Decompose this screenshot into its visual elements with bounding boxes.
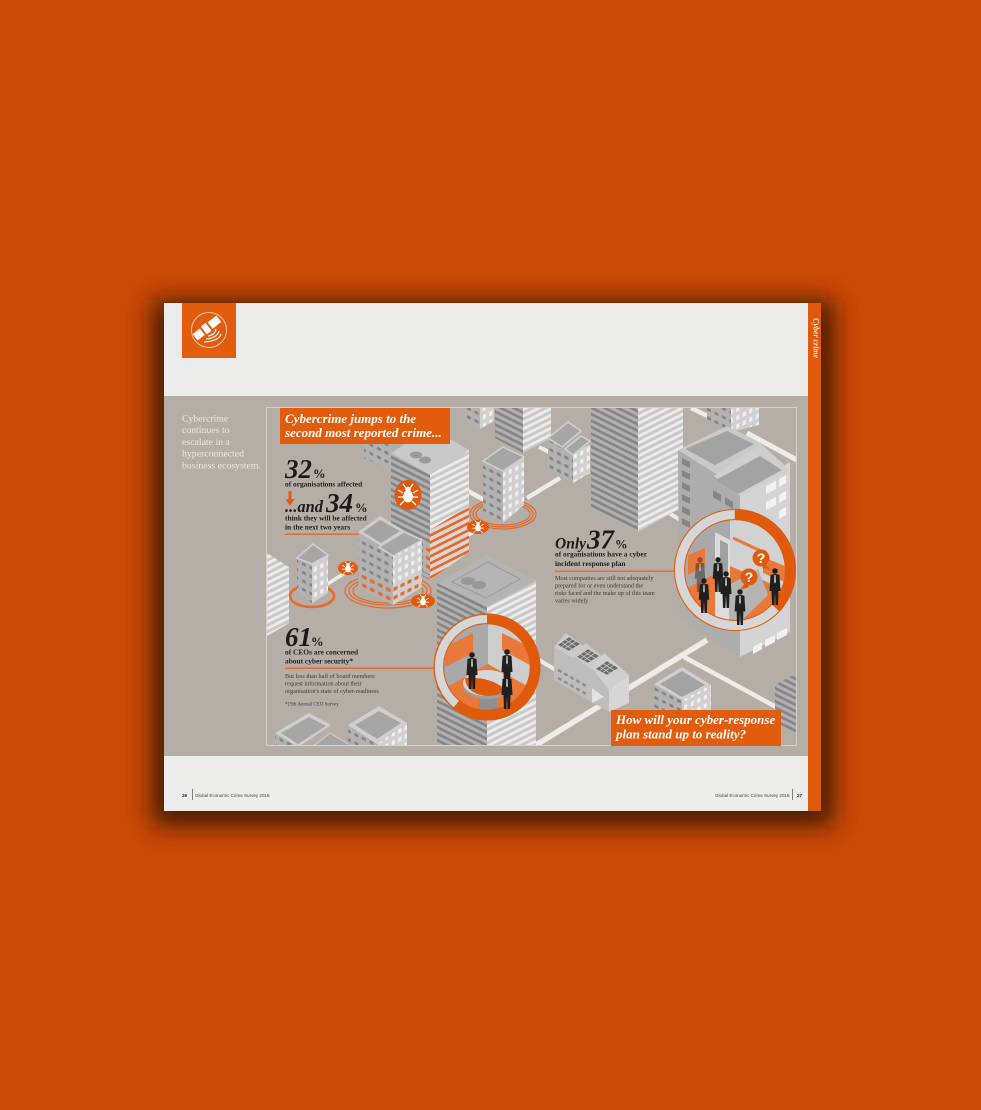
building: low right (654, 667, 711, 710)
stat: 61%: % (311, 635, 324, 649)
stat: 32% and 34%: in the next two years (285, 522, 350, 532)
stat: 37%: 37 (586, 524, 616, 554)
stat: 37% (555, 524, 676, 604)
brochure spread (164, 303, 821, 811)
stat: 32% and 34%: ...and (285, 497, 324, 516)
stat: 37%: % (615, 538, 628, 552)
page shadow (152, 300, 834, 826)
stat: 37%: prepared for or even understand the (555, 582, 643, 590)
building: stepped small (548, 422, 590, 483)
stat: 32% and 34%: % (313, 467, 326, 481)
icon: question bubbles (740, 550, 771, 590)
stat: 32% and 34%: think they will be affected (285, 514, 368, 522)
icon: question bubbles: ? (757, 550, 765, 566)
stat: 32% and 34%: % (355, 501, 368, 515)
stat: 61%: But less than half of board members (285, 673, 375, 680)
person (502, 649, 512, 686)
building: ringed right small (483, 447, 524, 523)
heading banner: top (280, 408, 450, 444)
stat: 61%: organisation's state of cyber-readiness (285, 688, 379, 695)
building: left edge (267, 553, 289, 636)
illustration frame (266, 408, 796, 746)
stat: 32% and 34%: 32 (284, 454, 312, 484)
building: tall with bug (391, 428, 469, 580)
circle chart: boardroom 61% (434, 614, 540, 720)
network rings (290, 499, 536, 608)
stat: 37%: risks faced and the make up of this team (555, 590, 655, 597)
bug nodes (338, 520, 489, 608)
heading banner: bottom (611, 710, 781, 746)
stat: 61%: of CEOs are concerned (285, 648, 359, 656)
stat: 61%: about cyber security* (285, 656, 353, 666)
grey content band (164, 396, 808, 756)
building: factory (554, 633, 629, 712)
footer: right: Global Economic Crime Survey 2015 (715, 793, 790, 798)
building: central large (437, 555, 536, 746)
intro text: Cybercrime (182, 414, 229, 424)
intro text: business ecosystem. (182, 460, 261, 472)
icon: down arrow (286, 491, 294, 506)
intro text: continues to (182, 425, 230, 436)
roads (318, 408, 797, 745)
building: mid orange windows (358, 516, 422, 605)
stat: 61% (285, 622, 435, 708)
icon: satellite badge (182, 303, 236, 358)
side tab label: Cyber crime (812, 318, 820, 359)
footer: left: 26 (182, 793, 188, 798)
building: right edge (775, 673, 797, 737)
intro text: hyperconnected (182, 448, 244, 460)
building: top right small (707, 408, 759, 432)
stat: 61%: 61 (285, 622, 312, 652)
stat: 37%: of organisations have a cyber (555, 550, 648, 558)
heading banner: bottom: How will your cyber-response (615, 712, 775, 727)
stat: 37%: Only (555, 536, 586, 552)
person (502, 672, 512, 709)
building: small left (297, 544, 328, 603)
stat: 32% and 34% (284, 454, 368, 535)
side tab (808, 303, 821, 811)
building: large right (678, 426, 790, 657)
building: top small (465, 408, 494, 429)
intro text: escalate in a (182, 437, 231, 448)
intro text (182, 414, 261, 472)
heading banner: top: second most reported crime... (284, 425, 442, 440)
buildings: bottom left (275, 706, 407, 748)
footer: left: Global Economic Crime Survey 2015 (195, 793, 270, 798)
people (695, 557, 780, 625)
circle chart: incident response 37% (674, 510, 796, 630)
heading banner: top: Cybercrime jumps to the (285, 411, 416, 426)
illustration: isometric city (267, 408, 797, 748)
stat: 37%: incident response plan (555, 559, 626, 568)
stat: 32% and 34%: 34 (325, 488, 353, 518)
building: top striped tower (495, 408, 551, 453)
bug badge: tower (394, 480, 422, 510)
footer: right: 27 (797, 793, 803, 798)
stat: 61%: *19th Annual CEO Survey (285, 702, 339, 708)
stat: 61%: request information about their (285, 680, 362, 688)
heading banner: bottom: plan stand up to reality? (615, 726, 747, 742)
footer: right (715, 789, 803, 800)
building: tall centre right (591, 408, 683, 532)
footer: left (182, 789, 270, 800)
icon: question bubbles: ? (745, 569, 753, 585)
stat: 37%: Most companies are still not adequately (555, 575, 654, 582)
stat: 37%: varies widely (555, 598, 589, 604)
building: rear of tower (364, 444, 392, 470)
stat: 32% and 34%: of organisations affected (285, 480, 363, 488)
